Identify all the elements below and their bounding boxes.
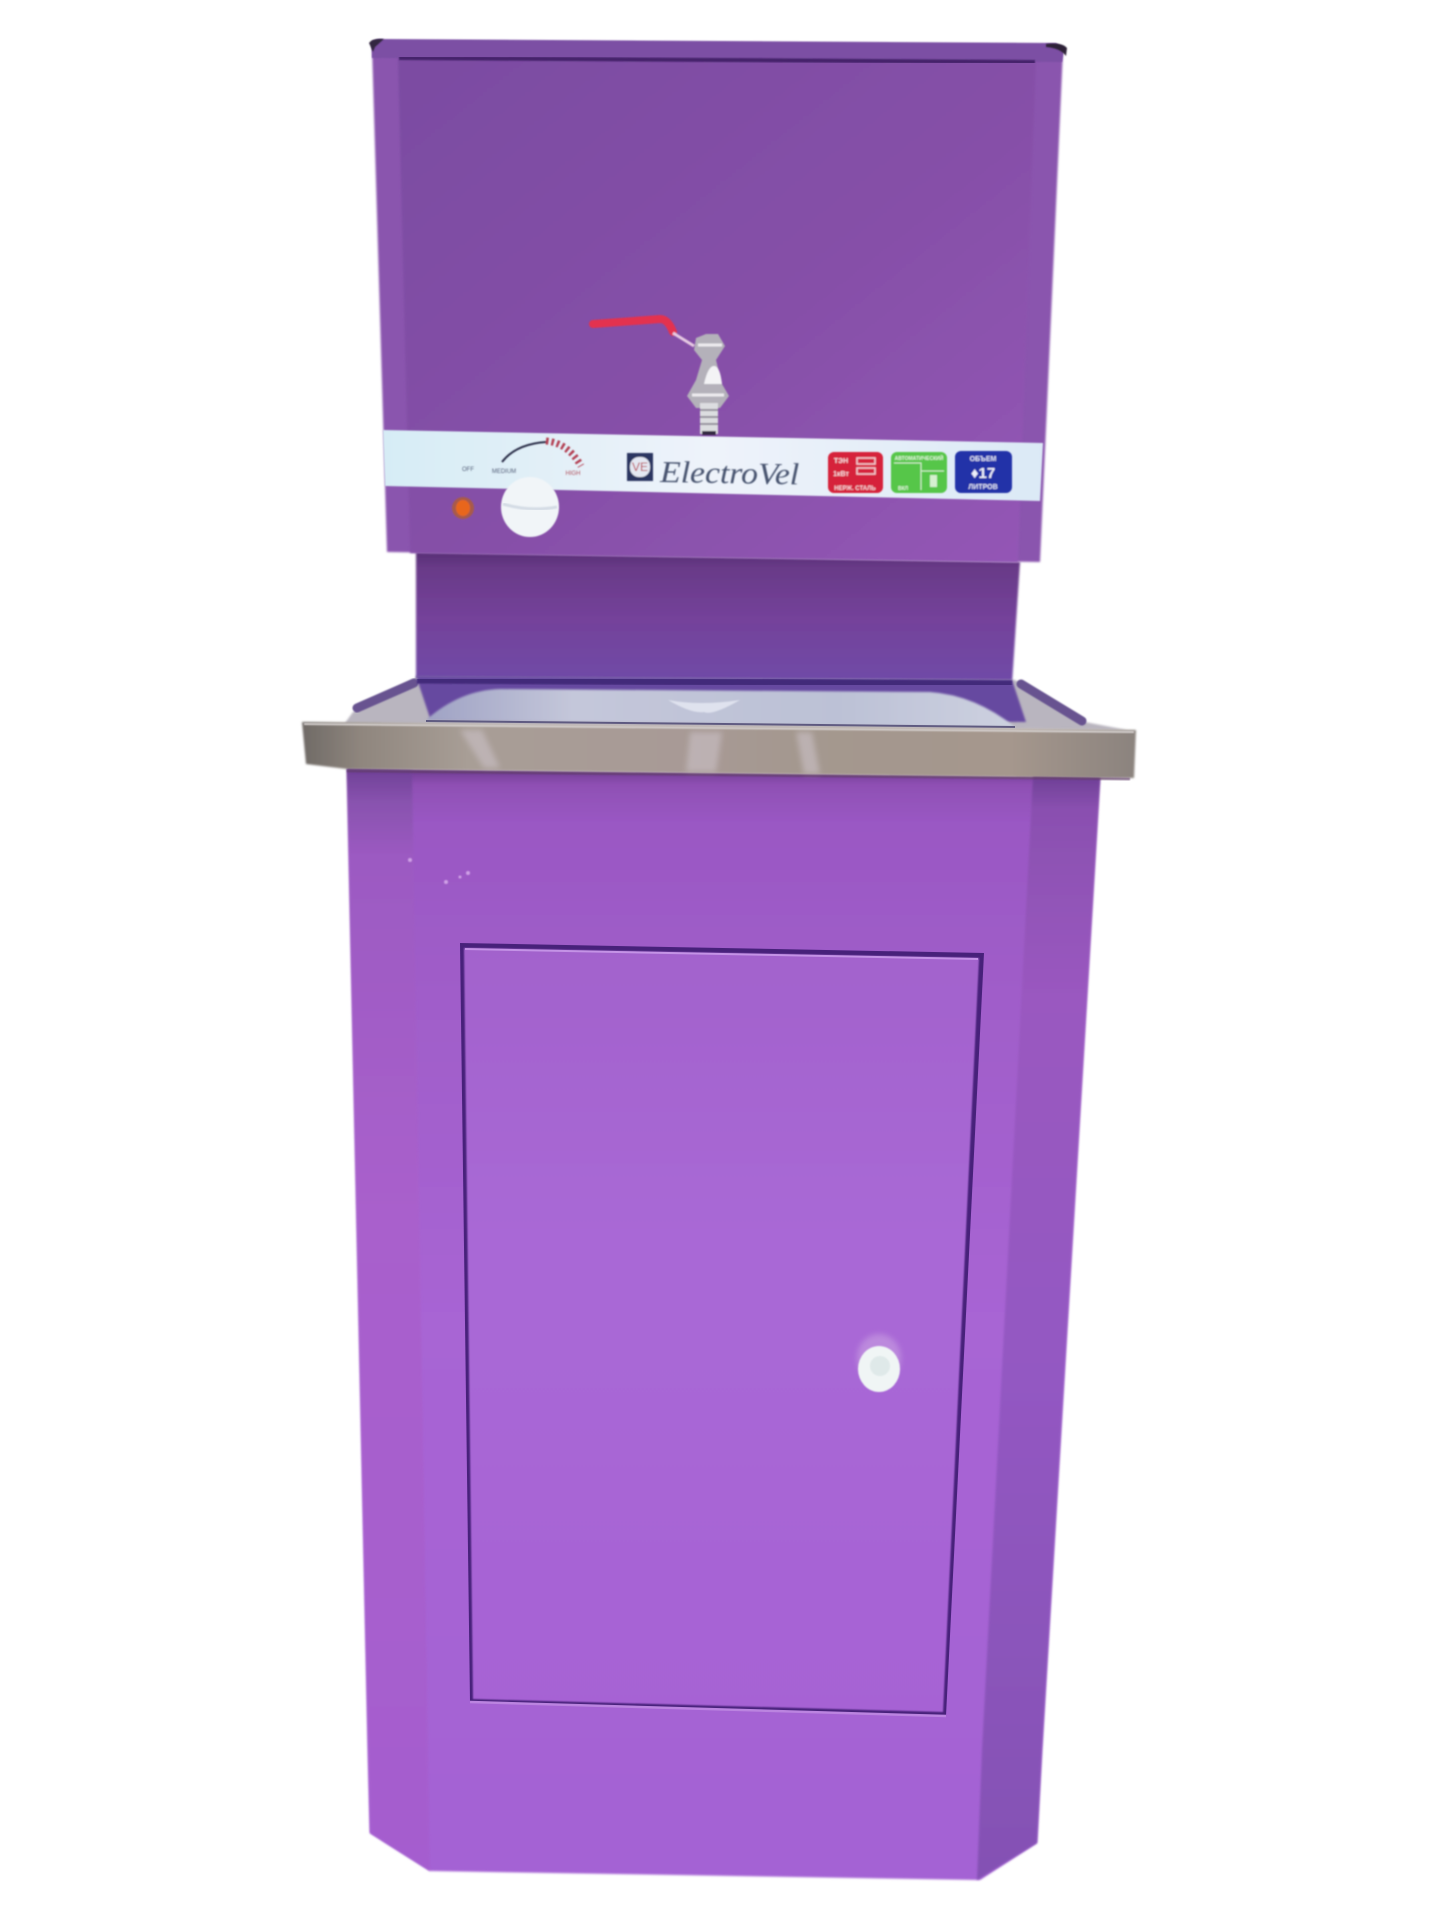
tap stem xyxy=(673,333,694,346)
temperature gauge: MEDIUM xyxy=(492,469,516,475)
steel front rim xyxy=(302,722,1136,778)
indicator lamp xyxy=(452,497,474,519)
cabinet: lower body with door xyxy=(347,768,1100,1880)
tank body xyxy=(372,46,1063,562)
tank corner right xyxy=(1046,44,1067,56)
rim reflections xyxy=(460,730,820,774)
left chamfer panel xyxy=(347,768,430,1871)
basin lower edge xyxy=(426,721,1015,727)
basin xyxy=(426,689,1015,727)
tank front panel xyxy=(398,58,1036,562)
rim shadow xyxy=(347,771,1130,779)
green badge: water level xyxy=(891,452,947,493)
tank top lip xyxy=(372,39,1064,62)
tap red lever xyxy=(593,319,673,332)
brand logo mark: VE xyxy=(632,460,648,474)
tap nozzle xyxy=(700,403,718,434)
blue badge: volume 17 litres: ЛИТРОВ xyxy=(968,484,998,491)
thermostat knob xyxy=(501,477,559,537)
temperature gauge: HIGH xyxy=(566,471,580,477)
right chamfer panel xyxy=(977,776,1100,1880)
purple right strut xyxy=(1021,684,1082,721)
dark groove under lip xyxy=(399,58,1035,62)
control band xyxy=(383,430,1043,501)
temperature gauge xyxy=(462,441,581,477)
tank corner left xyxy=(369,39,384,52)
paint specks xyxy=(408,858,470,884)
rim top highlight xyxy=(304,724,1134,732)
recess back shadow xyxy=(417,680,1012,684)
sink tray xyxy=(345,677,1127,730)
red badge: heating element: ТЭН xyxy=(834,458,848,465)
door bottom highlight xyxy=(470,1702,946,1716)
tap body xyxy=(687,334,729,408)
back support panel xyxy=(416,552,1020,684)
green badge: water level: ВКЛ xyxy=(898,486,909,492)
purple left strut xyxy=(357,683,414,708)
red badge: heating element: 1кВт xyxy=(833,471,849,478)
blue badge: volume 17 litres: ♦17 xyxy=(971,465,995,482)
water tank xyxy=(369,39,1067,562)
cabinet door xyxy=(460,943,984,1716)
temperature gauge: OFF xyxy=(462,467,474,473)
sink xyxy=(302,676,1136,779)
green badge: water level: АВТОМАТИЧЕСКИЙ xyxy=(895,454,944,462)
cabinet shell xyxy=(347,768,1100,1880)
door top highlight xyxy=(465,949,978,959)
brand logo mark xyxy=(627,453,653,481)
door knob xyxy=(857,1334,901,1392)
blue badge: volume 17 litres: ОБЪЕМ xyxy=(970,456,997,463)
basin drain reflection xyxy=(668,700,740,713)
blue badge: volume 17 litres xyxy=(955,451,1012,493)
water tap xyxy=(593,319,729,435)
red badge: heating element xyxy=(828,452,883,493)
basin recess xyxy=(416,676,1026,722)
brand name: ElectroVel xyxy=(659,454,799,491)
red badge: heating element: НЕРЖ. СТАЛЬ xyxy=(834,486,876,492)
